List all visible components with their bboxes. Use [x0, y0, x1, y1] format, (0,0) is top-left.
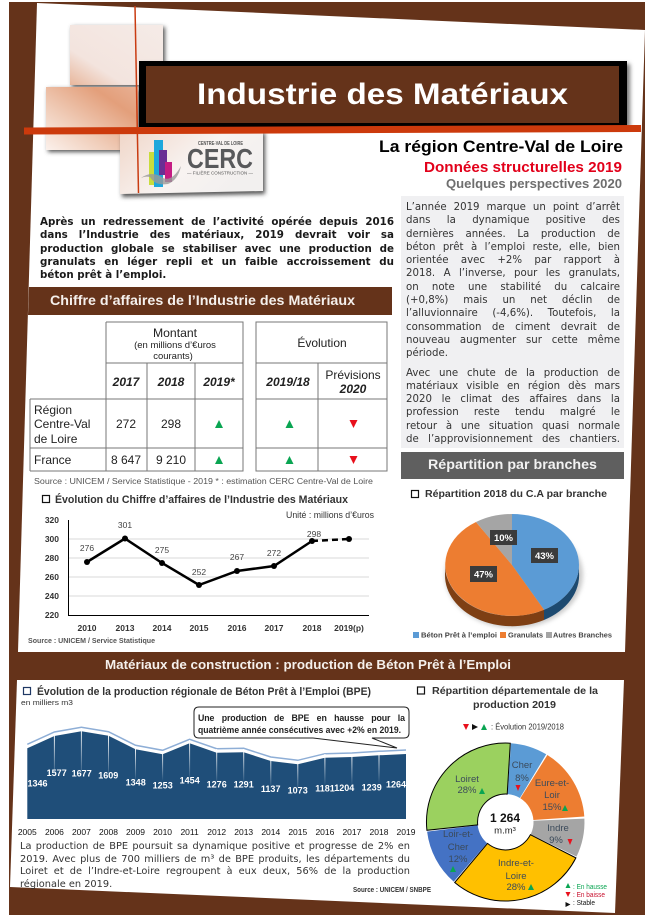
right column text: nouveau augmenter sur cette même — [406, 335, 620, 346]
right column text: 2020 le climat des affaires dans la — [406, 394, 620, 405]
donut chart: departments: 8% — [515, 773, 529, 784]
donut chart: departments: m.m³ — [494, 826, 516, 836]
donut title — [418, 685, 598, 711]
area chart: BPE production: 2015 — [288, 827, 308, 837]
donut chart: departments: Cher — [448, 842, 468, 853]
donut trend legend: : En baisse — [573, 892, 605, 899]
area chart: BPE production: 1239 — [362, 783, 382, 793]
area chart title: Évolution de la production régionale de Béton Prêt à l’Emploi (BPE) — [37, 685, 371, 698]
line chart: 2018 — [303, 623, 322, 633]
area chart: BPE production: 1181 — [315, 783, 335, 793]
line chart: 280 — [45, 553, 59, 563]
line chart: 260 — [45, 572, 59, 582]
BPE commentary text: Loiret et de l’Indre-et-Loire regroupent à eux deux, 56% de la production — [20, 866, 410, 877]
table: chiffre d'affaires: 2017 — [112, 375, 141, 389]
area chart: BPE production: 2012 — [207, 827, 226, 837]
line chart: 2010 — [78, 623, 97, 633]
area chart: BPE production: 2008 — [99, 827, 118, 837]
area chart: BPE production: 1346 — [27, 779, 48, 789]
donut trend legend: : En hausse — [573, 884, 607, 891]
donut chart: departments — [426, 743, 584, 901]
donut chart: departments: Loir — [544, 790, 560, 801]
bottom white panel — [10, 680, 624, 913]
donut title: production 2019 — [473, 699, 556, 711]
donut chart: departments: 12% — [448, 854, 468, 865]
donut chart: departments: 9% — [549, 835, 563, 846]
area chart: BPE production: 2006 — [45, 827, 64, 837]
table: chiffre d'affaires: 2020 — [339, 382, 367, 396]
line chart: 2013 — [116, 623, 135, 633]
area chart: BPE production: 1609 — [98, 771, 118, 781]
pie chart: branches: 10% — [494, 533, 514, 544]
grey text panel background — [401, 196, 624, 448]
donut evolution legend: : Évolution 2019/2018 — [491, 722, 565, 732]
right column text: béton prêt à l’emploi reste, elle, bien — [406, 242, 620, 253]
area chart: BPE production: 2009 — [126, 827, 145, 837]
pie legend: Granulats — [508, 630, 543, 640]
area chart: BPE production: 1348 — [126, 778, 146, 788]
area chart: BPE production: 1253 — [153, 781, 173, 791]
donut chart: departments: Loir-et- — [443, 829, 473, 840]
line chart: 220 — [45, 610, 59, 620]
donut chart: departments: 15% — [542, 802, 562, 813]
area chart: BPE production: 2010 — [153, 827, 172, 837]
title banner: Industrie des Matériaux — [197, 78, 568, 111]
table: chiffre d'affaires: 2018 — [157, 375, 185, 389]
logo: CERC card: CERC — [187, 143, 253, 174]
right column text: L’année 2019 marque un point d’arrêt — [406, 202, 620, 213]
callout: Une production de BPE en hausse pour la — [198, 713, 405, 723]
area chart: BPE production: 2018 — [370, 827, 389, 837]
subheading: perspectives: Quelques perspectives 2020 — [446, 176, 622, 191]
right column text: retour à une situation quasi normale — [406, 421, 620, 432]
line chart: 301 — [118, 520, 132, 530]
pie title: Répartition 2018 du C.A par branche — [425, 489, 607, 500]
area chart: BPE production: 1137 — [261, 784, 280, 794]
line chart: 298 — [307, 529, 321, 539]
table: chiffre d'affaires: Région — [34, 403, 72, 417]
line chart — [45, 510, 374, 633]
donut chart: departments: 28% — [457, 785, 477, 796]
pie legend — [413, 630, 612, 640]
pie legend: Béton Prêt à l’emploi — [421, 630, 497, 640]
area chart: BPE production: 2007 — [72, 827, 91, 837]
right column text: consommation de ciment devrait de — [406, 322, 620, 333]
intro text: production globale se stabiliser avec une production de — [40, 243, 394, 255]
donut chart: departments: 1 264 — [490, 811, 520, 825]
line chart source: Source : UNICEM / Service Statistique — [28, 636, 155, 645]
table: chiffre d'affaires: Prévisions — [325, 368, 381, 382]
logo: CERC card: — FILIÈRE CONSTRUCTION — — [187, 170, 254, 176]
donut chart: departments: Cher — [512, 760, 532, 771]
right band: répartition par branches — [401, 452, 624, 479]
pie legend: Autres Branches — [553, 630, 612, 640]
donut trend legend: : Stable — [573, 900, 595, 907]
area chart: BPE production: 1264 — [386, 779, 406, 789]
BPE source: Source : UNICEM / SNBPE — [353, 887, 431, 894]
line chart: 2017 — [265, 623, 284, 633]
line chart: Unité : millions d’€uros — [286, 510, 374, 520]
table: chiffre d'affaires: 298 — [161, 417, 181, 431]
intro text: béton prêt à l’emploi. — [40, 269, 166, 281]
area chart: BPE production: 1204 — [334, 783, 354, 793]
line chart: 272 — [267, 548, 281, 558]
line chart: 240 — [45, 591, 59, 601]
right column text: matériaux visible en région dès mars — [406, 381, 620, 392]
right column text: (+0,8%) mais un net déclin de — [406, 295, 620, 306]
right column text: profession reste tendu malgré le — [406, 407, 620, 418]
right column text: Avec une chute de la production de — [406, 368, 620, 379]
table: chiffre d'affaires: Montant — [153, 326, 198, 340]
donut evolution legend — [463, 722, 565, 732]
area chart: BPE production: 1677 — [72, 769, 92, 779]
area chart: BPE production: 2005 — [18, 827, 37, 837]
band: chiffre d'affaires — [28, 287, 392, 315]
table: chiffre d'affaires: Évolution — [297, 335, 347, 350]
area chart: BPE production: 1276 — [207, 780, 227, 790]
table: chiffre d'affaires: courants) — [153, 351, 193, 362]
right column text: période. — [406, 348, 448, 359]
donut chart: departments: Loiret — [455, 774, 479, 785]
table: chiffre d'affaires: 272 — [116, 417, 136, 431]
donut chart: departments: 28% — [506, 882, 526, 893]
intro text: Après un redressement de l’activité opérée depuis 2016 — [40, 216, 394, 228]
area chart: BPE production: 1454 — [180, 775, 200, 785]
table: chiffre d'affaires — [30, 322, 387, 471]
area chart: BPE production: 2017 — [342, 827, 362, 837]
pie chart: branches — [445, 514, 583, 628]
line chart: 300 — [45, 534, 59, 544]
right column text: 2018. A l’inverse, pour les granulats, — [406, 268, 620, 279]
area chart: BPE production: 2011 — [180, 827, 199, 837]
line chart: 267 — [230, 552, 244, 562]
area chart: BPE production: 1073 — [288, 785, 308, 795]
BPE commentary text — [20, 841, 410, 890]
BPE commentary text: 2019. Avec plus de 700 milliers de m³ de BPE produits, les départements du — [20, 854, 410, 864]
donut title: Répartition départementale de la — [432, 685, 598, 697]
right column text: l’alluvionnaire (-4,6%). Toutefois, la — [406, 308, 620, 319]
line chart: 320 — [45, 515, 59, 525]
table: chiffre d'affaires: Centre-Val — [34, 417, 90, 431]
table: chiffre d'affaires: 8 647 — [111, 453, 141, 467]
area chart: BPE production: 2016 — [315, 827, 335, 837]
intro text — [40, 216, 394, 281]
right column text: on note une stabilité du calcaire — [406, 282, 620, 293]
table: chiffre d'affaires: 2019* — [202, 375, 236, 389]
top white panel — [18, 3, 645, 652]
intro text: dans l’Industrie des matériaux, 2019 devrait voir sa — [40, 229, 394, 241]
donut chart: departments: Indre-et- — [498, 858, 534, 869]
red vertical line — [135, 6, 138, 193]
table: chiffre d'affaires: (en millions d’€uros — [134, 340, 216, 351]
area chart: BPE production — [18, 727, 416, 837]
right column text: dernières années. La production de — [406, 229, 620, 240]
callout: quatrième année consécutives avec +2% en 2019. — [198, 725, 401, 735]
line chart: 2014 — [153, 623, 172, 633]
band: chiffre d'affaires: Chiffre d’affaires de l’Industrie des Matériaux — [50, 292, 355, 308]
orange horizontal line — [24, 125, 641, 134]
intro text: granulats en léger repli et un faible accroissement du — [40, 256, 394, 268]
line chart: 2016 — [228, 623, 247, 633]
area chart: BPE production: 1291 — [234, 779, 254, 789]
pie chart: branches: 43% — [535, 551, 555, 562]
right column text: de l’approvisionnement des chantiers. — [406, 434, 620, 445]
logo: CERC card: CENTRE-VAL DE LOIRE — [198, 141, 244, 147]
line chart: 2019(p) — [334, 623, 364, 633]
logo: CERC card — [120, 131, 265, 197]
subheading: structural data: Données structurelles 2019 — [424, 160, 622, 176]
area chart unit: en milliers m3 — [21, 698, 73, 707]
heading: region: La région Centre-Val de Loire — [379, 137, 623, 156]
line chart: 275 — [155, 545, 169, 555]
area chart: BPE production: 2013 — [234, 827, 253, 837]
right column text: orientée avec +2% par rapport à — [406, 255, 620, 266]
table: chiffre d'affaires: 2019/18 — [265, 375, 310, 389]
line chart title: Évolution du Chiffre d’affaires de l’Industrie des Matériaux — [55, 493, 349, 506]
BPE commentary text: régionale en 2019. — [20, 878, 112, 890]
donut chart: departments: Eure-et- — [535, 778, 569, 789]
right column text: dans la dynamique positive des — [406, 215, 620, 226]
area chart: BPE production: 2014 — [261, 827, 281, 837]
decorative header squares — [46, 25, 165, 152]
band: matériaux de construction: Matériaux de construction : production de Béton Prêt à l’Emploi — [105, 657, 511, 672]
donut trend legend — [566, 883, 607, 907]
donut chart: departments: Indre — [547, 823, 569, 834]
pie chart: branches: 47% — [474, 570, 494, 580]
right column text — [406, 201, 620, 445]
title banner — [139, 61, 630, 128]
area chart: BPE production: 1577 — [47, 768, 67, 778]
donut chart: departments: Loire — [505, 871, 527, 882]
right band: répartition par branches: Répartition par branches — [428, 457, 597, 472]
callout — [194, 707, 409, 748]
line chart: 2015 — [190, 623, 209, 633]
table: chiffre d'affaires: de Loire — [34, 432, 78, 446]
BPE commentary text: La production de BPE poursuit sa dynamique positive et progresse de 2% en — [20, 841, 410, 852]
area chart: BPE production: 2019 — [397, 827, 416, 837]
table: chiffre d'affaires: France — [34, 453, 72, 467]
line chart: 252 — [192, 567, 206, 577]
table source: Source : UNICEM / Service Statistique - 2019 * : estimation CERC Centre-Val de Loire — [34, 477, 374, 486]
table: chiffre d'affaires: 9 210 — [156, 453, 186, 467]
line chart: 276 — [80, 543, 94, 553]
